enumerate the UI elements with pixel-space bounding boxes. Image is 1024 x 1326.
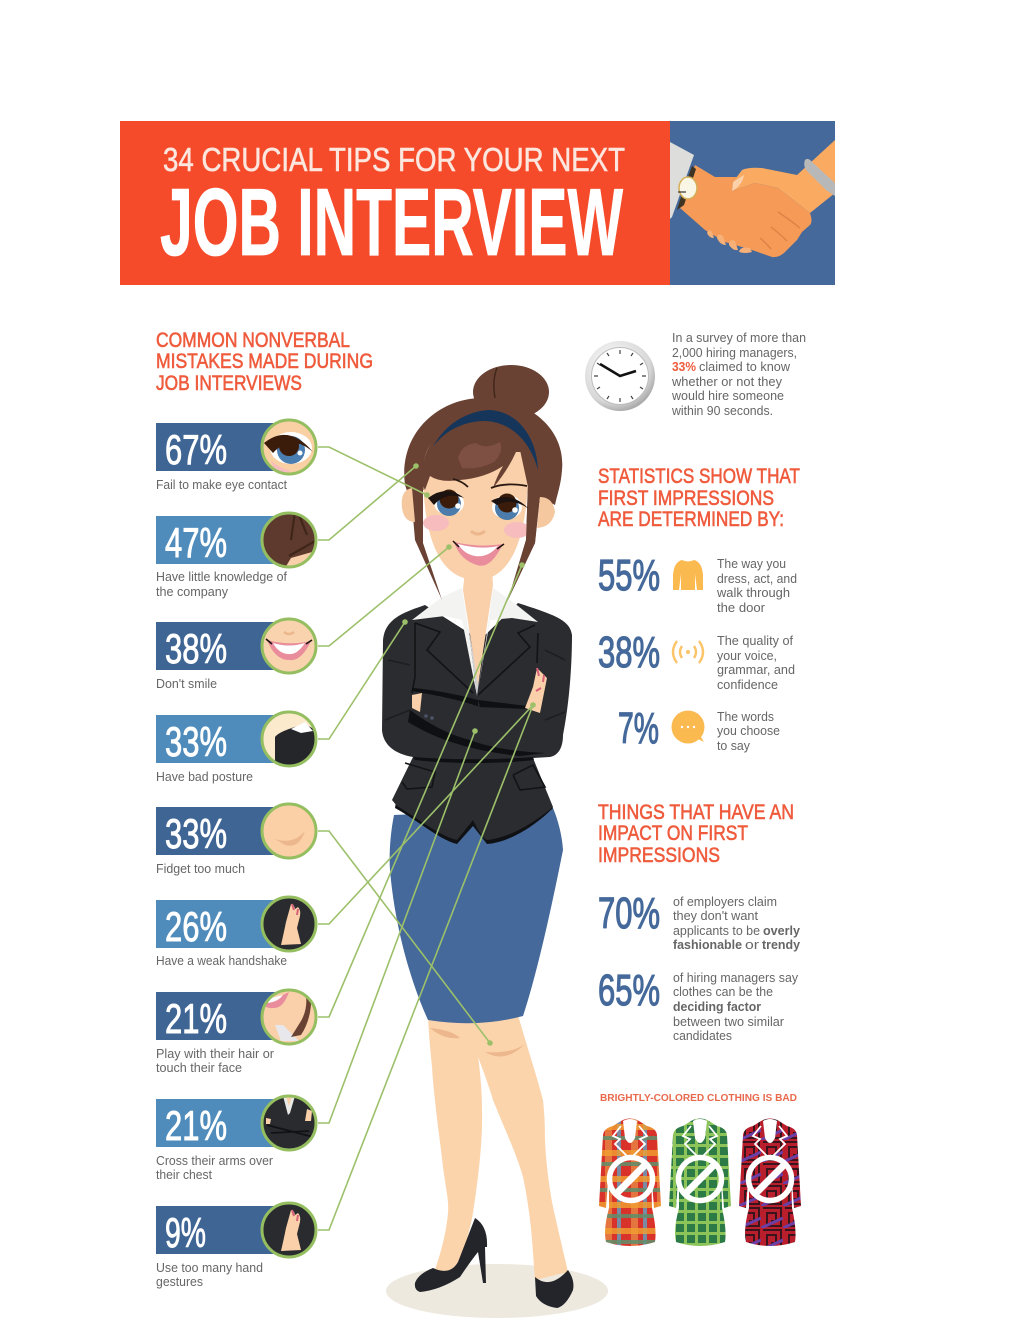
bar: [156, 715, 289, 763]
shirt collar: [412, 588, 538, 696]
description: clothes can be the: [673, 985, 773, 999]
survey text: within 90 seconds.: [671, 404, 773, 418]
survey text: would hire someone: [671, 389, 784, 403]
description: they don't want: [673, 909, 759, 923]
description: The words: [717, 710, 774, 724]
icon: sweater: [673, 560, 703, 590]
description: or: [745, 938, 759, 952]
value: 33%: [165, 718, 227, 765]
description: the door: [717, 601, 765, 615]
icon: face and hair: [261, 990, 316, 1044]
bar: [156, 1206, 289, 1254]
icon: hand: [262, 897, 316, 951]
bar: [156, 516, 289, 564]
icon: hair: [262, 512, 319, 570]
value: 21%: [165, 1102, 227, 1149]
heading: nonverbal mistakes: COMMON NONVERBAL: [156, 329, 350, 352]
icon: knee: [262, 804, 316, 858]
description: of employers claim: [673, 895, 777, 909]
value: 7%: [618, 704, 659, 753]
banner red panel: [120, 121, 670, 285]
heading: impact on first impressions: IMPRESSIONS: [598, 844, 720, 867]
survey text: 33%: [672, 360, 696, 374]
bar: [156, 807, 289, 855]
heading: first impressions statistics: ARE DETERMINED BY:: [598, 508, 784, 531]
description: trendy: [762, 938, 800, 952]
skirt: [390, 808, 563, 1023]
value: 33%: [165, 810, 227, 857]
description: deciding factor: [673, 1000, 761, 1014]
icon: sound waves: [673, 641, 703, 663]
statistic: 65 percent: [598, 966, 799, 1043]
blush: [423, 515, 449, 531]
value: 38%: [165, 625, 227, 672]
bar: [156, 423, 289, 471]
stat: 21 percent hair: [156, 990, 316, 1075]
statistic: 7 percent: [618, 704, 780, 753]
description: between two similar: [673, 1015, 784, 1029]
value: 9%: [165, 1209, 206, 1256]
statistic: 70 percent: [598, 889, 800, 952]
heading: first impressions statistics: FIRST IMPRESSIONS: [598, 487, 774, 510]
stat: 47 percent: [156, 512, 319, 599]
description: overly: [763, 924, 800, 938]
ears: [402, 488, 555, 528]
heading: impact on first impressions: IMPACT ON FIRST: [598, 822, 748, 845]
bar: [156, 992, 289, 1040]
bar: [156, 1099, 289, 1147]
icon: clock: [585, 341, 655, 411]
value: 70%: [598, 889, 660, 938]
right shoe: [535, 1270, 573, 1308]
floor shadow: [386, 1264, 608, 1318]
title small line: 34 CRUCIAL TIPS FOR YOUR NEXT: [163, 141, 625, 178]
hair bun: [473, 365, 549, 419]
coat: plaid red: [599, 1118, 661, 1246]
caption: Cross their arms over: [156, 1154, 273, 1168]
heading: impact on first impressions: [598, 801, 794, 867]
heading: first impressions statistics: [598, 465, 800, 531]
value: 47%: [165, 519, 227, 566]
nose: [471, 531, 485, 534]
heading: nonverbal mistakes: MISTAKES MADE DURING: [156, 350, 373, 373]
heading: nonverbal mistakes: JOB INTERVIEWS: [156, 372, 302, 395]
icon: crossed arms: [262, 1096, 316, 1150]
caption: their chest: [156, 1168, 213, 1182]
survey text: whether or not they: [671, 375, 783, 389]
caption: brightly colored clothing: BRIGHTLY-COLORED CLOTHING IS BAD: [600, 1092, 797, 1104]
value: 26%: [165, 903, 227, 950]
stat: 33 percent fidget: [156, 804, 316, 876]
caption: touch their face: [156, 1061, 242, 1075]
description: candidates: [673, 1029, 732, 1043]
hair fringe and locks: [421, 414, 540, 600]
icon: eye: [262, 420, 316, 475]
value: 65%: [598, 966, 660, 1015]
description: grammar, and: [717, 663, 795, 677]
description: to say: [717, 739, 751, 753]
caption: Don't smile: [156, 677, 217, 691]
bar: [156, 900, 289, 948]
description: The way you: [717, 557, 786, 571]
description: you choose: [717, 724, 780, 738]
survey text: claimed to know: [699, 360, 791, 374]
stat: 38 percent: [156, 619, 316, 691]
banner blue panel: [670, 121, 835, 285]
lapels and arm folds: [385, 623, 565, 790]
header banner: [120, 121, 835, 285]
caption: Fidget too much: [156, 862, 245, 876]
connector lines: [318, 447, 536, 1230]
value: 38%: [598, 628, 660, 677]
icon: shoulder: [262, 712, 317, 769]
caption: the company: [156, 585, 229, 599]
caption: Use too many hand: [156, 1261, 263, 1275]
caption: Fail to make eye contact: [156, 478, 288, 492]
title large line: JOB INTERVIEW: [160, 169, 623, 276]
value: 55%: [598, 551, 660, 600]
face: [423, 420, 528, 580]
bar: [156, 622, 289, 670]
icon: gesture hand: [262, 1203, 316, 1257]
jacket: [382, 603, 572, 844]
survey text: 2,000 hiring managers,: [672, 346, 797, 360]
headband: [433, 410, 538, 470]
caption: Play with their hair or: [156, 1047, 274, 1061]
jacket body: [382, 603, 572, 840]
description: The quality of: [717, 634, 794, 648]
description: fashionable: [673, 938, 742, 952]
description: confidence: [717, 678, 778, 692]
hair back: [404, 398, 562, 600]
caption: Have little knowledge of: [156, 570, 288, 584]
description: of hiring managers say: [673, 971, 799, 985]
description: dress, act, and: [717, 572, 797, 586]
description: applicants to be: [673, 924, 760, 938]
left shoe: [415, 1218, 487, 1292]
stat: 26 percent: [156, 897, 316, 968]
value: 67%: [165, 426, 227, 473]
icon: smile: [262, 619, 316, 673]
heading: nonverbal mistakes: [156, 329, 373, 395]
caption: gestures: [156, 1275, 203, 1289]
icon: speech bubble: [672, 710, 704, 744]
eyes: [428, 479, 529, 520]
coat: geometric red: [739, 1118, 801, 1246]
description: your voice,: [717, 649, 777, 663]
neck and chest: [463, 570, 493, 685]
caption: Have bad posture: [156, 770, 253, 784]
smile: [453, 541, 504, 566]
legs: [428, 1015, 568, 1280]
statistic: 55 percent: [598, 551, 797, 615]
survey text: In a survey of more than: [672, 331, 806, 345]
description: walk through: [716, 586, 790, 600]
figure: woman in business suit: [382, 365, 608, 1318]
coat: plaid green: [669, 1118, 731, 1246]
caption: Have a weak handshake: [156, 954, 287, 968]
stat: 67 percent: [156, 420, 316, 492]
icon: handshake: [670, 140, 835, 257]
jacket hem shadow: [395, 795, 553, 844]
stat: 21 percent arms: [156, 1096, 316, 1182]
statistic: 38 percent: [598, 628, 795, 692]
value: 21%: [165, 995, 227, 1042]
stat: 33 percent posture: [156, 712, 317, 784]
heading: impact on first impressions: THINGS THAT HAVE AN: [598, 801, 794, 824]
heading: first impressions statistics: STATISTICS SHOW THAT: [598, 465, 800, 488]
hands: [412, 668, 547, 713]
stat: 9 percent: [156, 1203, 316, 1289]
